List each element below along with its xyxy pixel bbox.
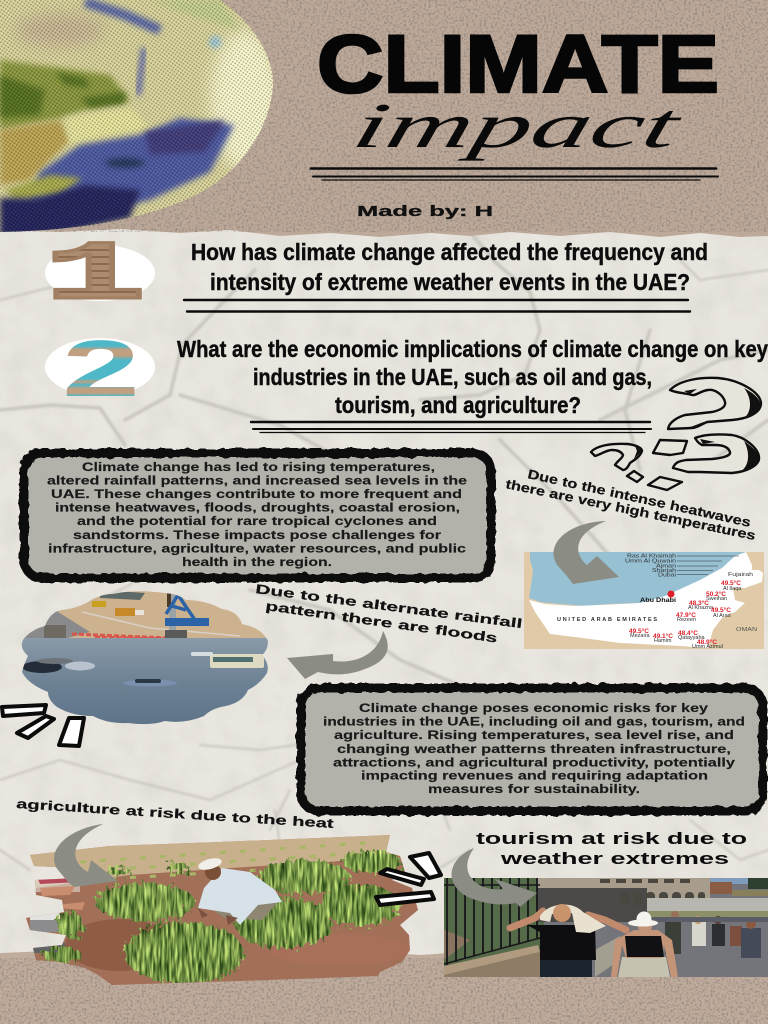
- map labels: 49.5°C: [721, 579, 741, 587]
- map labels: 47.9°C: [676, 611, 696, 619]
- weather events text: infrastructure, agriculture, water resources, and public: [48, 542, 466, 556]
- map labels: 48.3°C: [689, 599, 709, 607]
- number badge 2: [45, 324, 155, 413]
- caption: floods: pattern there are floods: [265, 598, 498, 646]
- economic risks text: changing weather patterns threaten infrastructure,: [337, 742, 731, 756]
- caption: heatwaves: [504, 466, 757, 543]
- caption: tourism: tourism at risk due to: [476, 829, 747, 848]
- map labels: 48.9°C: [697, 638, 717, 646]
- caption: heatwaves: Due to the intense heatwaves: [526, 466, 752, 530]
- economic risks text: industries in the UAE, including oil and gas, tourism, and: [323, 714, 745, 728]
- title: CLIMATE: [317, 19, 719, 110]
- map labels: Al Ilaqa: [723, 586, 742, 592]
- map labels: Ras Al Khaimah: [627, 554, 676, 560]
- icon: question marks: [591, 378, 761, 490]
- map labels: Abu Dhabi: [640, 597, 676, 604]
- weather events text: Climate change has led to rising temperatures,: [82, 460, 435, 474]
- byline: Made by: H: [357, 204, 493, 220]
- weather events text: UAE. These changes contribute to more frequent and: [51, 487, 462, 501]
- map labels: 48.4°C: [678, 629, 698, 637]
- map labels: [557, 554, 757, 650]
- farmer: [197, 856, 282, 925]
- burst marks: farm: [376, 853, 441, 905]
- map labels: Qatayyaha: [678, 635, 706, 641]
- question 2: industries in the UAE, such as oil and gas,: [253, 364, 652, 390]
- caption: floods: [255, 581, 523, 646]
- question 2 underline: [251, 422, 651, 432]
- panel: economic risks summary: [301, 688, 763, 811]
- economic risks text: impacting revenues and requiring adaptation: [361, 768, 708, 782]
- arrow: to farm photo: [54, 824, 118, 887]
- weather events text: [47, 460, 467, 569]
- weather events text: health in the region.: [182, 555, 332, 569]
- title underline: [311, 168, 718, 180]
- map labels: UNITED ARAB EMIRATES: [557, 617, 657, 623]
- torn top paper band: [0, 0, 768, 237]
- illustration: halftone globe: [0, 0, 280, 236]
- subtitle script: impact: [346, 91, 690, 162]
- map labels: Hamim: [654, 638, 672, 644]
- economic risks text: Climate change poses economic risks for key: [359, 701, 708, 715]
- map labels: OMAN: [736, 627, 757, 633]
- tourist with towel: [510, 904, 626, 977]
- question 2: [177, 336, 768, 418]
- map labels: Dubai: [658, 572, 676, 578]
- map labels: Fujairah: [728, 572, 753, 578]
- economic risks text: measures for sustainability.: [428, 782, 640, 796]
- caption: tourism: weather extremes: [499, 849, 729, 868]
- caption: agriculture: agriculture at risk due to the heat: [16, 796, 335, 831]
- photo: flooded road: [22, 591, 268, 724]
- question 2: tourism, and agriculture?: [335, 392, 581, 418]
- map labels: Sweihan: [706, 596, 727, 602]
- torn bottom paper band: [0, 951, 768, 1024]
- number badge 2: 2: [62, 324, 140, 413]
- map labels: 49.5°C: [711, 606, 731, 614]
- question 1 underline: [184, 300, 690, 312]
- arrow: to tourism photo: [452, 848, 537, 907]
- map: UAE temperatures: [524, 552, 764, 650]
- caption: heatwaves: there are very high temperatures: [504, 476, 757, 543]
- weather events text: and the potential for rare tropical cyclones and: [77, 514, 437, 528]
- photo: farmer tending grass: [26, 835, 418, 985]
- map labels: 49.1°C: [653, 632, 673, 640]
- arrow: to flood photo: [287, 631, 388, 679]
- map labels: Sharjah: [652, 568, 676, 574]
- caption: floods: Due to the alternate rainfall: [255, 581, 523, 631]
- tourist with hat: [611, 912, 678, 977]
- question 1: intensity of extreme weather events in the UAE?: [210, 269, 690, 295]
- economic risks text: attractions, and agricultural productivity, potentially: [333, 756, 735, 770]
- question 1: [191, 239, 708, 295]
- map labels: 49.5°C: [629, 627, 649, 635]
- photo: tourists near the Colosseum: [444, 878, 768, 977]
- economic risks text: agriculture. Rising temperatures, sea level rise, and: [334, 728, 734, 742]
- map labels: Al Arad: [713, 613, 731, 619]
- burst marks: flood: [2, 705, 84, 746]
- economic risks text: [323, 701, 745, 796]
- map labels: Umm Azimul: [692, 644, 723, 650]
- map labels: Umm Al Quwain: [625, 558, 676, 564]
- caption: tourism: [476, 829, 747, 868]
- map labels: 50.2°C: [706, 590, 726, 598]
- question 1: How has climate change affected the frequency and: [191, 239, 708, 265]
- crowd: [650, 911, 768, 958]
- map labels: Mezaira: [630, 633, 651, 639]
- map labels: Al Khazna: [688, 605, 714, 611]
- arrow: to map: [554, 521, 619, 584]
- map labels: Ajman: [656, 564, 676, 570]
- map labels: Rezeen: [677, 617, 696, 623]
- number badge 1: 1: [44, 229, 146, 324]
- weather events text: intense heatwaves, floods, droughts, coastal erosion,: [55, 500, 460, 514]
- number badge 1: [44, 229, 155, 324]
- panel: weather events summary: [24, 453, 491, 578]
- weather events text: altered rainfall patterns, and increased sea levels in the: [47, 474, 467, 488]
- weather events text: sandstorms. These impacts pose challenges for: [73, 528, 441, 542]
